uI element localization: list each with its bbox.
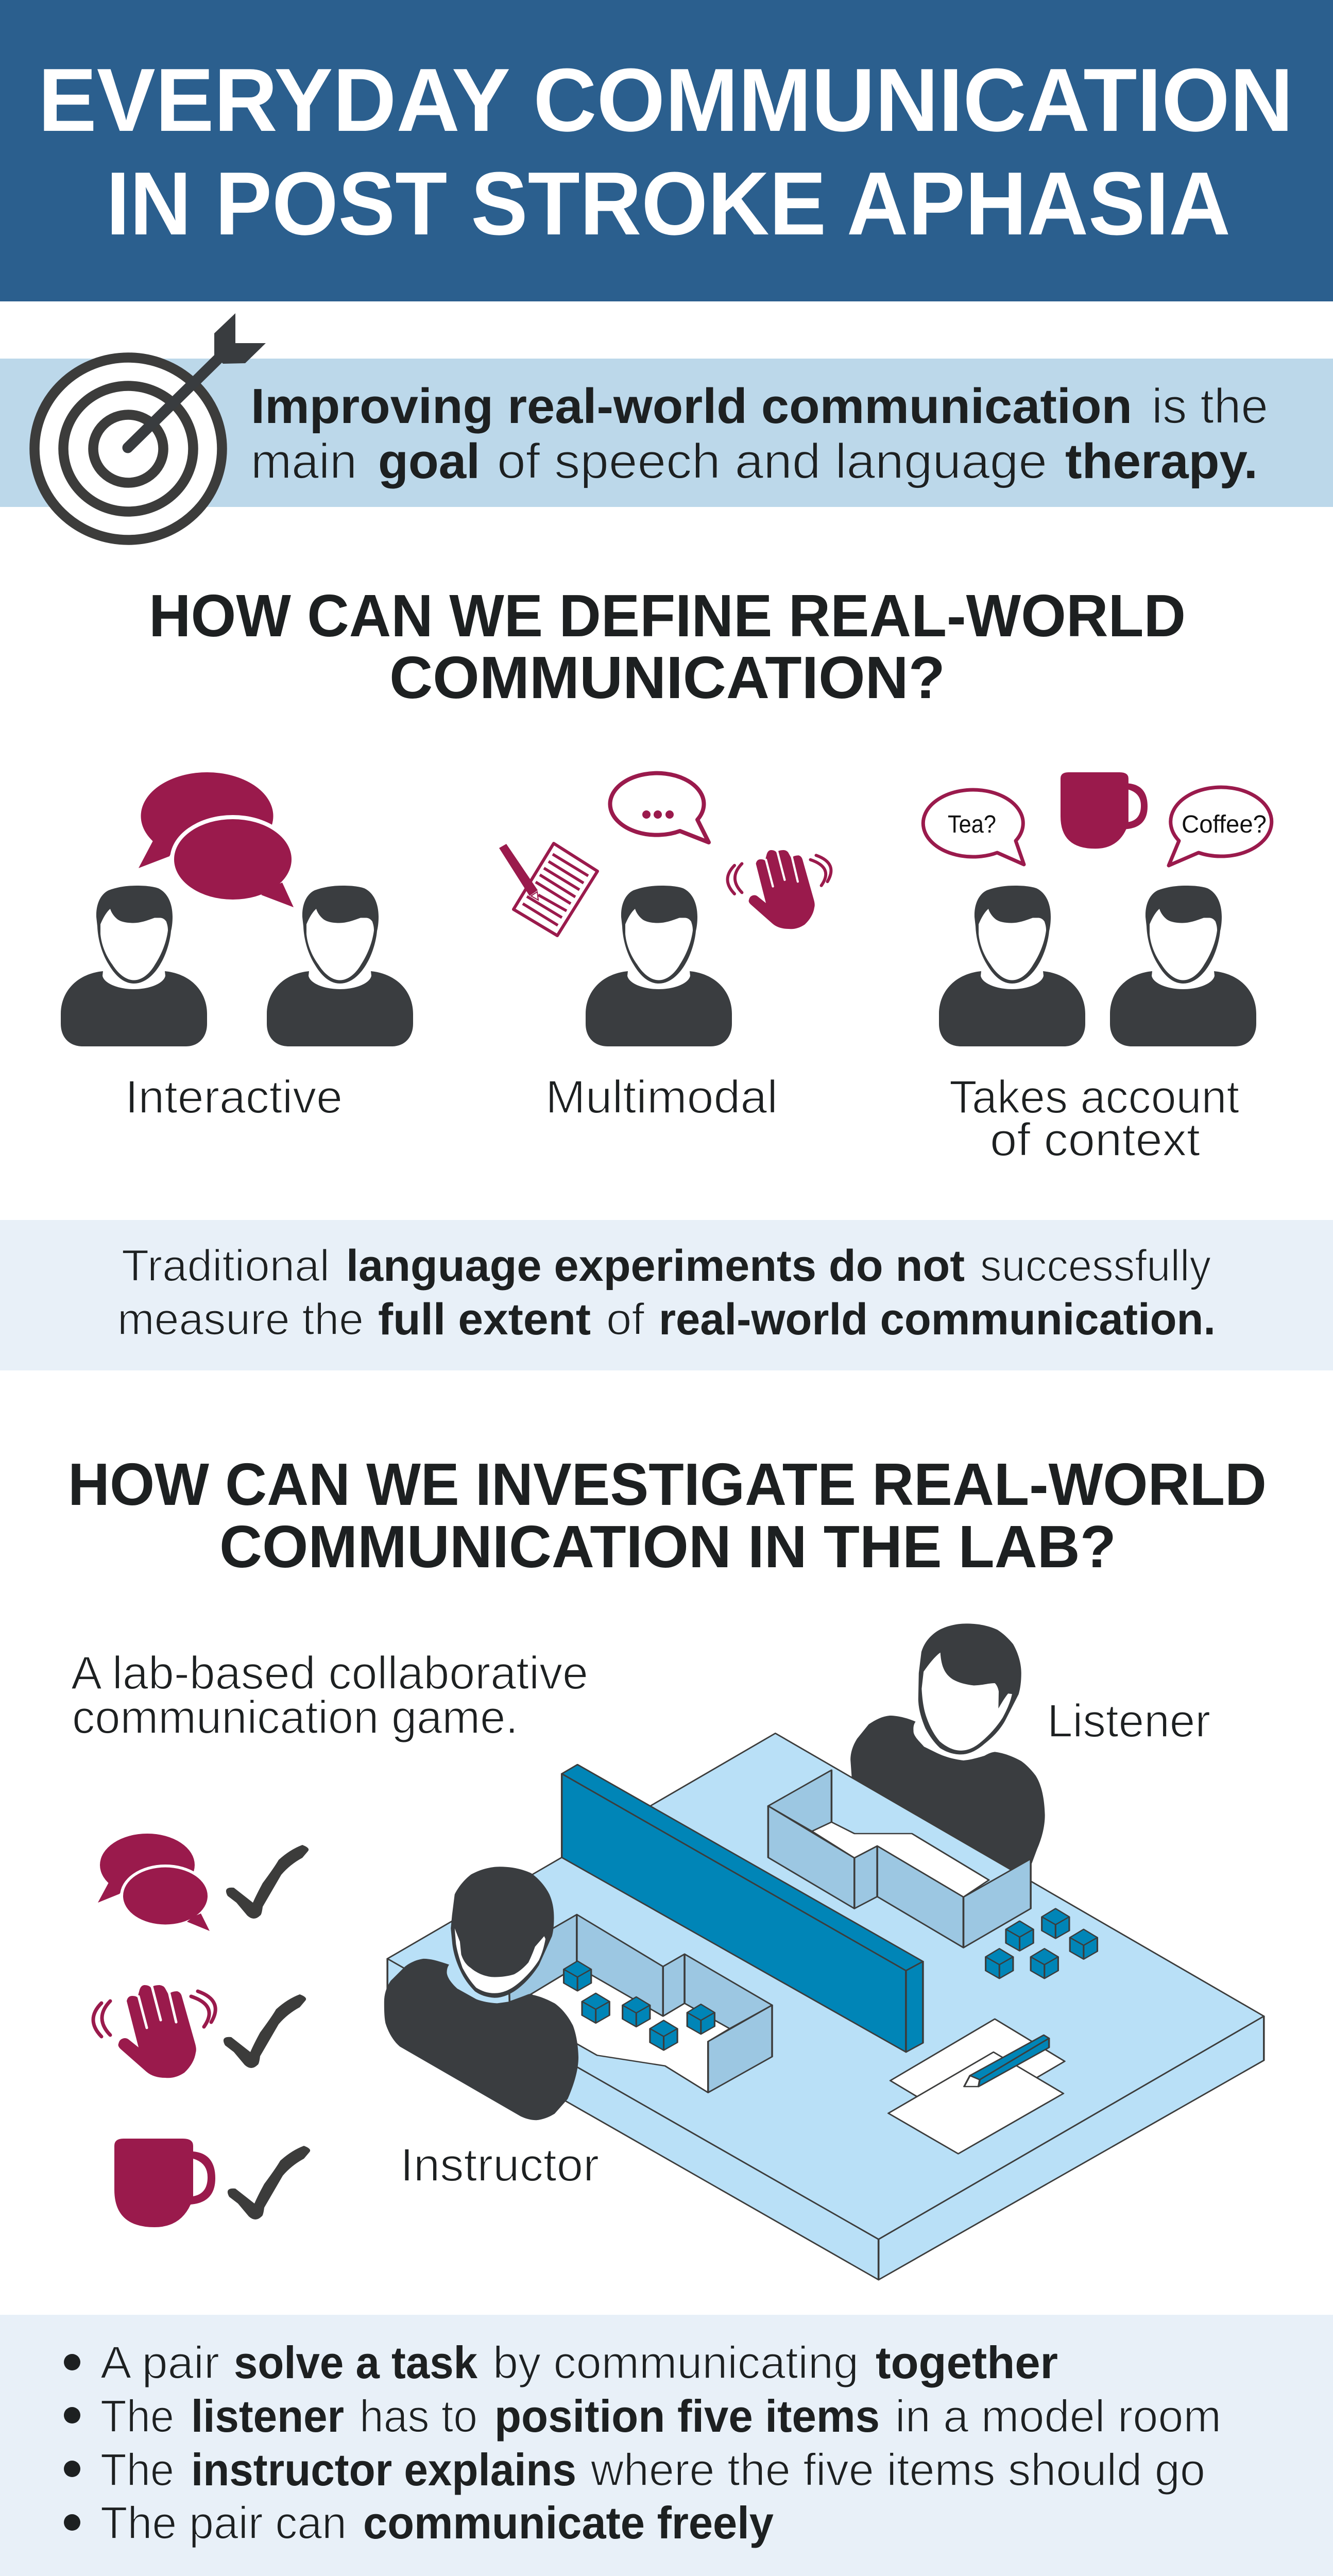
- title: [38, 49, 1293, 253]
- bullet three: The: [100, 2444, 174, 2495]
- label: interactive: Interactive: [125, 1072, 343, 1123]
- goal text: Improving real-world communication: [251, 379, 1132, 434]
- checklist: [93, 1834, 310, 2227]
- table platform: [387, 1733, 1264, 2280]
- icon: person left: [61, 886, 207, 1046]
- bullet two: [64, 2391, 1221, 2442]
- heading: define real-world communication: [149, 582, 1186, 711]
- icon: notepad and pen: [499, 843, 597, 936]
- goal text: is the: [1152, 379, 1268, 434]
- goal text: of speech and language: [497, 434, 1047, 489]
- header banner: [0, 0, 1333, 301]
- bullet one: together: [876, 2337, 1058, 2388]
- heading: investigate in the lab: [68, 1451, 1267, 1580]
- icon: mug: [114, 2139, 215, 2227]
- instructor model room: [508, 1914, 772, 2093]
- icon: target with arrow: [35, 313, 266, 540]
- listener five items: [986, 1908, 1097, 1978]
- listener figure: [850, 1623, 1045, 1870]
- bullet one: by communicating: [493, 2337, 859, 2388]
- title: EVERYDAY COMMUNICATION: [38, 49, 1293, 150]
- icon: speech bubbles: [98, 1834, 211, 1931]
- icon: coffee speech bubble: Coffee?: [1182, 811, 1267, 838]
- callout: traditional experiments: measure the: [117, 1295, 364, 1344]
- heading: investigate in the lab: COMMUNICATION IN THE LAB?: [219, 1513, 1116, 1580]
- goal text: goal: [378, 434, 480, 489]
- text: lab-based game description: A lab-based collaborative: [71, 1648, 588, 1699]
- goal band: [0, 313, 1333, 540]
- goal text: [251, 379, 1268, 489]
- icon: person left: [939, 886, 1085, 1046]
- icon: two overlapping speech bubbles: [139, 772, 296, 907]
- icon: speech bubble with dots: [610, 773, 709, 842]
- callout: traditional experiments: language experiments do not: [346, 1241, 965, 1291]
- label: multimodal: Multimodal: [545, 1072, 778, 1123]
- bullet four: The pair can: [100, 2497, 347, 2548]
- icon: waving hand: [93, 1985, 215, 2078]
- panel: multimodal: [499, 773, 831, 1123]
- bullet three: where the five items should go: [590, 2444, 1205, 2495]
- heading: define real-world communication: COMMUNICATION?: [389, 644, 945, 711]
- icon: person right: [267, 886, 413, 1046]
- instructor figure: [384, 1867, 578, 2120]
- label: takes account of context: of context: [990, 1114, 1200, 1166]
- icon: coffee speech bubble: [1169, 787, 1272, 866]
- text: lab-based game description: communication game.: [72, 1692, 518, 1743]
- text: lab-based game description: [71, 1648, 588, 1743]
- callout: traditional experiments: Traditional: [122, 1241, 330, 1291]
- callout: traditional experiments: of: [606, 1295, 645, 1344]
- bullet one: [64, 2337, 1058, 2388]
- icon: check one: [226, 1845, 309, 1919]
- panel: bullet summary: [0, 2315, 1333, 2576]
- label: instructor: Instructor: [400, 2140, 599, 2191]
- callout: traditional experiments: successfully: [980, 1241, 1211, 1291]
- goal text: therapy.: [1065, 434, 1258, 489]
- bullet two: The: [100, 2391, 174, 2442]
- bullet three: instructor explains: [191, 2444, 576, 2495]
- icon: tea speech bubble: [923, 790, 1024, 865]
- instructor five items: [564, 1961, 714, 2050]
- bullet one: A pair: [100, 2337, 219, 2388]
- icon: mug: [1061, 772, 1148, 849]
- paper sheets and pencil: [888, 2019, 1065, 2154]
- bullet one: solve a task: [234, 2337, 478, 2388]
- title: IN POST STROKE APHASIA: [106, 153, 1231, 253]
- dividing screen: [562, 1765, 923, 2052]
- goal text: main: [251, 434, 357, 489]
- callout: traditional experiments: full extent: [378, 1295, 591, 1344]
- icon: tea speech bubble: Tea?: [948, 811, 996, 838]
- callout: traditional experiments: real-world communication.: [659, 1295, 1216, 1344]
- panel: interactive: [61, 772, 413, 1123]
- icon: person right: [1110, 886, 1256, 1046]
- bullet four: [64, 2497, 774, 2548]
- icon: check three: [228, 2146, 310, 2219]
- panel: takes account of context: [923, 772, 1272, 1166]
- label: takes account of context: Takes account: [949, 1072, 1239, 1123]
- bullet two: position five items: [494, 2391, 880, 2442]
- heading: define real-world communication: HOW CAN WE DEFINE REAL-WORLD: [149, 582, 1186, 649]
- bullet two: listener: [191, 2391, 344, 2442]
- bullet two: has to: [360, 2391, 477, 2442]
- bullet three: [64, 2444, 1205, 2495]
- icon: person: [586, 886, 732, 1046]
- label: listener: Listener: [1047, 1696, 1210, 1747]
- bullet four: communicate freely: [363, 2497, 774, 2548]
- bullet two: in a model room: [895, 2391, 1221, 2442]
- callout: traditional experiments: [0, 1220, 1333, 1370]
- heading: investigate in the lab: HOW CAN WE INVESTIGATE REAL-WORLD: [68, 1451, 1267, 1518]
- icon: check two: [224, 1994, 306, 2068]
- label: takes account of context: [949, 1072, 1239, 1166]
- isometric lab illustration: [384, 1623, 1264, 2280]
- icon: waving hand: [727, 850, 831, 929]
- listener model room: [768, 1770, 1031, 1947]
